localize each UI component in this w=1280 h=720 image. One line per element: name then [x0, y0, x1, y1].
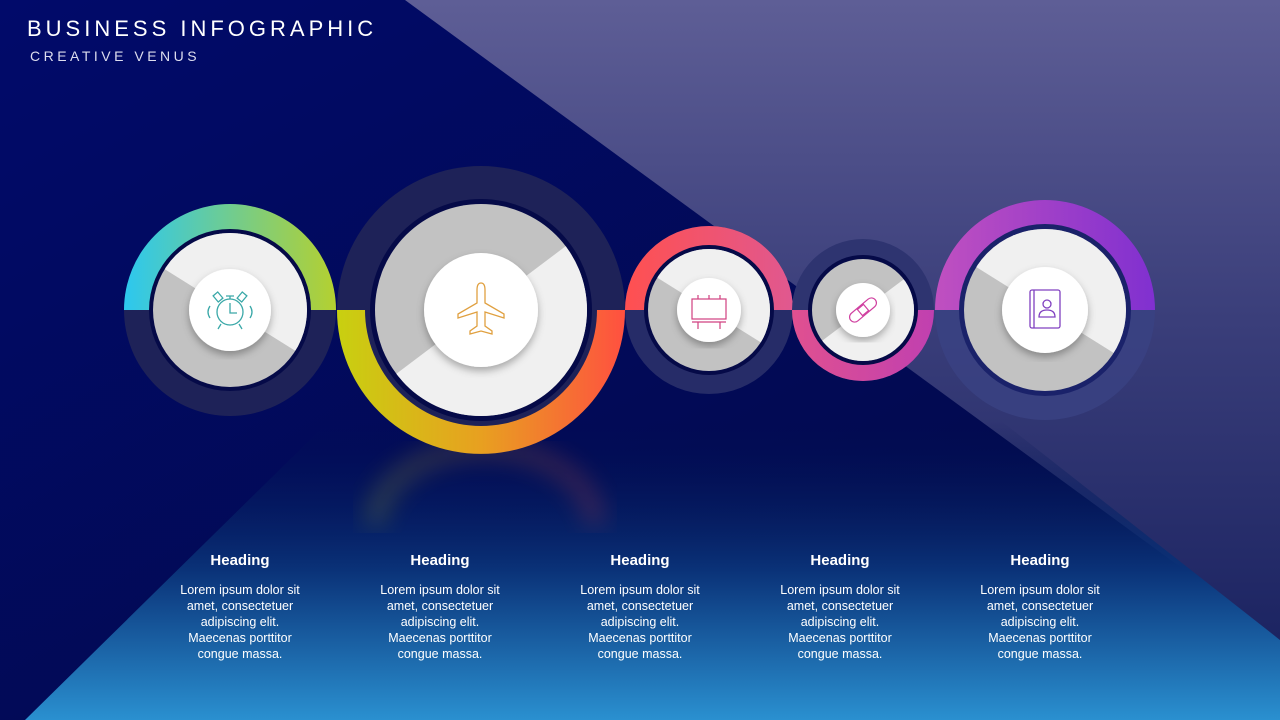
text block 2: Heading: [410, 552, 470, 569]
text block 5: adipiscing elit.: [1001, 615, 1079, 629]
text block 4: congue massa.: [798, 647, 882, 661]
text block 3: [580, 552, 700, 661]
text block 3: amet, consectetuer: [587, 599, 693, 613]
text block 5: amet, consectetuer: [987, 599, 1093, 613]
circle 3: [625, 226, 792, 394]
text block 2: congue massa.: [398, 647, 482, 661]
circle 5: [935, 200, 1155, 420]
text block 4: adipiscing elit.: [801, 615, 879, 629]
text block 1: adipiscing elit.: [201, 615, 279, 629]
text block 4: [780, 552, 900, 661]
icon: airplane: [458, 283, 504, 334]
icon: bandage: [848, 296, 878, 324]
circle 4: [792, 239, 934, 381]
text block 5: [980, 552, 1100, 661]
text block 5: Heading: [1010, 552, 1070, 569]
text block 1: amet, consectetuer: [187, 599, 293, 613]
text block 3: Lorem ipsum dolor sit: [580, 583, 700, 597]
text block 4: Lorem ipsum dolor sit: [780, 583, 900, 597]
text block 1: Heading: [210, 552, 270, 569]
icon: alarm clock: [208, 292, 252, 329]
text block 4: Heading: [810, 552, 870, 569]
title: BUSINESS INFOGRAPHIC: [27, 16, 377, 41]
icon: contact book: [1030, 290, 1060, 328]
circle 1: [124, 204, 336, 416]
text block 2: Lorem ipsum dolor sit: [380, 583, 500, 597]
text block 3: congue massa.: [598, 647, 682, 661]
text block 3: Heading: [610, 552, 670, 569]
text block 5: congue massa.: [998, 647, 1082, 661]
circle 2: [337, 166, 625, 454]
text block 2: adipiscing elit.: [401, 615, 479, 629]
text block 5: Lorem ipsum dolor sit: [980, 583, 1100, 597]
subtitle: CREATIVE VENUS: [30, 48, 200, 64]
text block 1: congue massa.: [198, 647, 282, 661]
text block 2: Maecenas porttitor: [388, 631, 492, 645]
text block 2: amet, consectetuer: [387, 599, 493, 613]
text block 4: Maecenas porttitor: [788, 631, 892, 645]
text block 3: adipiscing elit.: [601, 615, 679, 629]
icon: billboard: [692, 295, 726, 329]
text block 5: Maecenas porttitor: [988, 631, 1092, 645]
text block 2: [380, 552, 500, 661]
text block 1: [180, 552, 300, 661]
text block 1: Maecenas porttitor: [188, 631, 292, 645]
text block 3: Maecenas porttitor: [588, 631, 692, 645]
text block 4: amet, consectetuer: [787, 599, 893, 613]
text block 1: Lorem ipsum dolor sit: [180, 583, 300, 597]
reflection glow: [375, 449, 595, 525]
